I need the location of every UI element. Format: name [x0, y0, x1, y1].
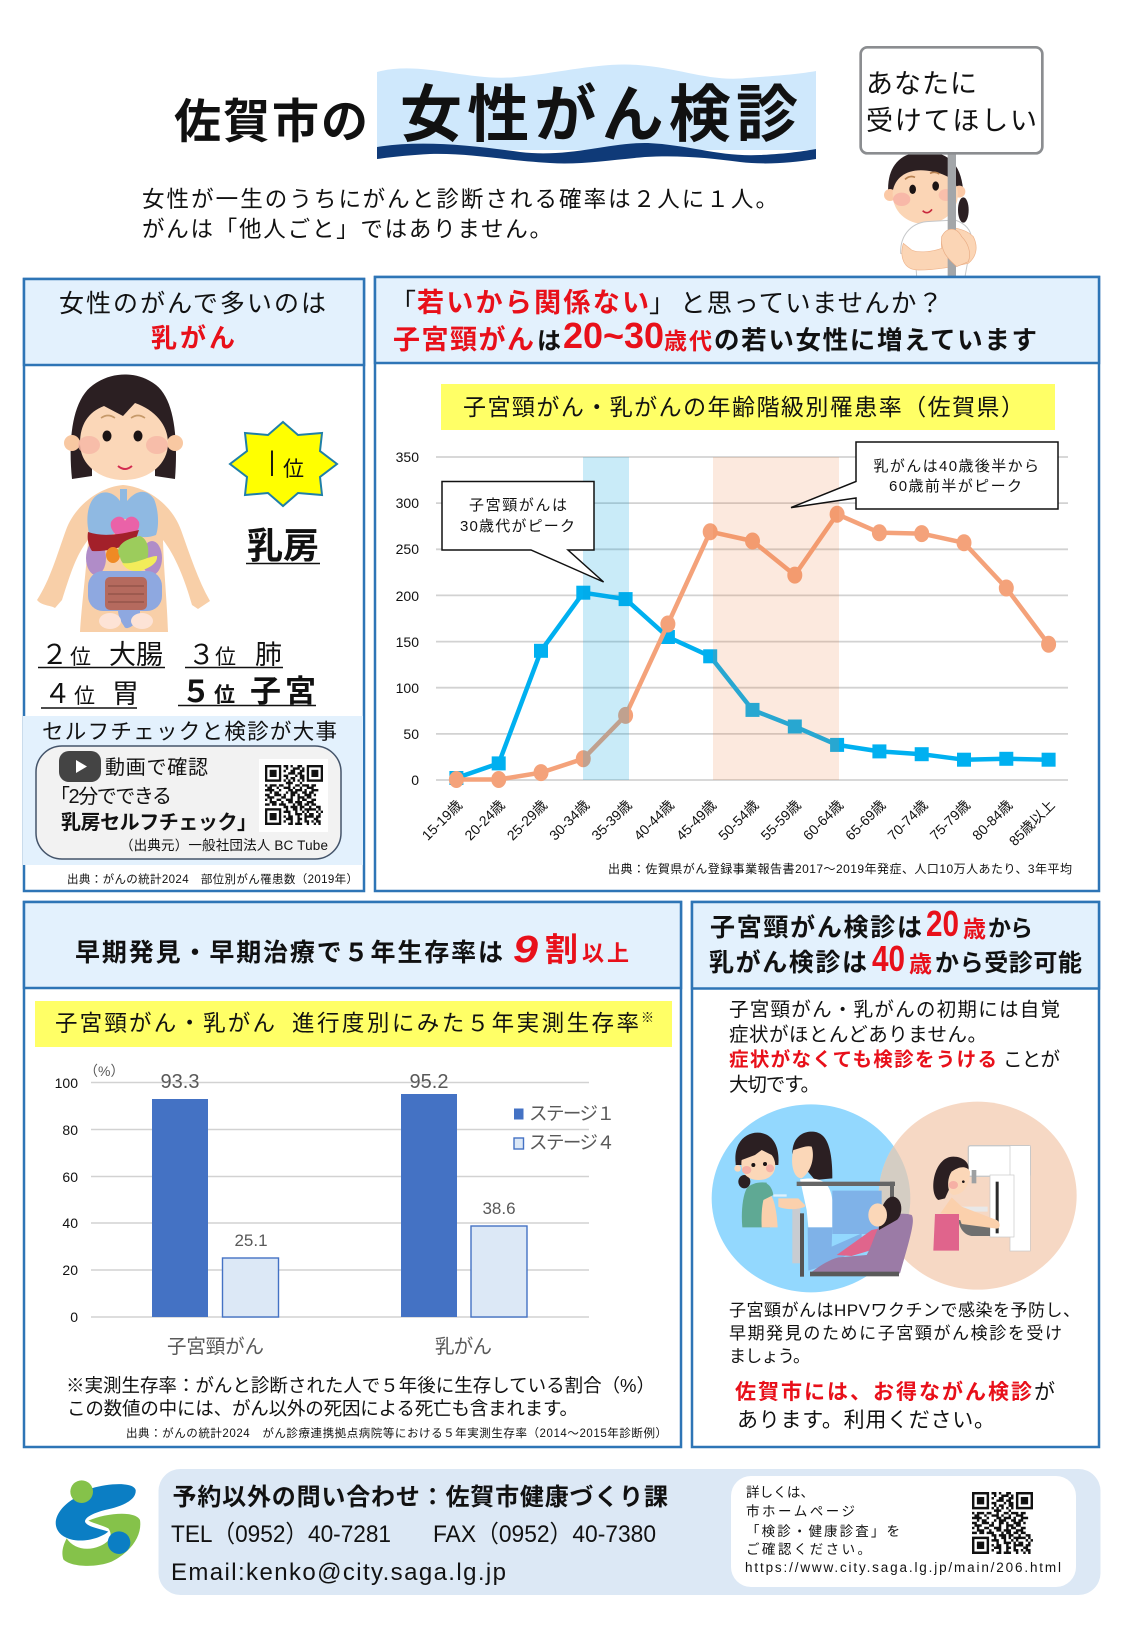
contact box [158, 1469, 1100, 1595]
bar: cervical stage 1 [152, 1099, 208, 1317]
panel header: 乳がん [151, 323, 235, 353]
panel header: は [537, 328, 561, 355]
panel header: から受診可能 [935, 950, 1082, 977]
x axis labels: 40-44歳 [630, 797, 677, 843]
source: cancer statistics: 出典：がんの統計2024 部位別がん罹患数（2019年） [67, 872, 358, 886]
panel header: 女性のがんで多いのは [59, 290, 326, 318]
source: Saga registry: 出典：佐賀県がん登録事業報告書2017～2019年発症、人口10万人あたり、3年平均 [608, 861, 1072, 876]
source: survival statistics: 出典：がんの統計2024 がん診療連携拠点病院等における５年実測生存率（2014～2015年診断例） [126, 1426, 667, 1440]
panel header: 乳がん検診は [709, 948, 867, 977]
callout: breast peak: 乳がんは40歳後半から [874, 458, 1039, 475]
rank 5: 子宮 [178, 674, 316, 709]
value labels: 25.1 [234, 1231, 268, 1250]
rank 3: 肺: 肺 [255, 640, 282, 670]
panel header: から [988, 915, 1033, 941]
text: Saga city offer: が [1034, 1381, 1055, 1404]
x axis labels: 75-79歳 [927, 797, 973, 843]
panel: 5年生存率 [24, 902, 681, 1447]
panel header [24, 279, 364, 365]
website card: 市ホームページ [746, 1504, 855, 1519]
website card: 「検診・健康診査」を [746, 1523, 900, 1539]
panel header: 割 [545, 931, 578, 968]
panel frame [24, 279, 364, 891]
callout: breast peak [791, 442, 1058, 509]
sign text: 受けてほしい [866, 106, 1037, 136]
video callout box: （出典元）一般社団法人 BC Tube [120, 838, 328, 853]
panel header: 歳代 [664, 328, 712, 354]
y axis labels [55, 1075, 78, 1325]
x axis labels: 35-39歳 [588, 797, 635, 843]
text: symptoms [729, 999, 1060, 1096]
y axis labels: 100 [55, 1075, 78, 1091]
y axis labels: 20 [62, 1262, 78, 1278]
intro text [142, 187, 778, 242]
panel header [692, 902, 1099, 988]
x axis labels: 30-34歳 [546, 797, 592, 843]
y axis labels: 0 [411, 772, 419, 788]
panel header: の若い女性に増えています [714, 327, 1037, 355]
rank 3: 肺: ３ [188, 640, 215, 670]
x axis labels: 15-19歳 [419, 797, 465, 843]
panel header: 歳 [909, 951, 932, 977]
video callout box [36, 746, 341, 859]
rank 4: 胃: 位 [74, 685, 95, 708]
x axis labels: 20-24歳 [461, 797, 508, 843]
phone and fax: TEL（0952）40-7281 [171, 1521, 391, 1548]
illustration: vaccination and screening [712, 1102, 1077, 1292]
text: Saga city offer: 佐賀市には、お得ながん検診 [735, 1380, 1032, 1404]
y axis labels: 60 [62, 1169, 78, 1185]
self-check section: セルフチェックと検診が大事 [42, 720, 337, 744]
panel header: 歳 [963, 916, 986, 942]
text: symptoms: 大切です。 [729, 1074, 820, 1096]
footnote: この数値の中には、がん以外の死因による死亡も含まれます。 [67, 1398, 578, 1419]
y axis labels: 100 [396, 680, 419, 696]
title band: 女性がん検診 [377, 64, 816, 163]
legend [514, 1103, 615, 1153]
rank 5: 子宮: 位 [214, 684, 235, 707]
category labels: 子宮頸がん [167, 1336, 264, 1358]
rank 4: 胃: 胃 [112, 679, 139, 709]
rank 4: 胃 [41, 679, 139, 709]
y axis labels: 80 [62, 1122, 78, 1138]
value labels: 95.2 [410, 1071, 448, 1093]
bar chart: 5-year survival [55, 1063, 615, 1358]
rank 2: 大腸: 位 [70, 646, 91, 669]
highlight: age 45-64 [713, 457, 839, 780]
y axis grid [436, 457, 1068, 780]
callout: cervical peak: 30歳代がピーク [460, 518, 575, 535]
intro text: がんは「他人ごと」ではありません。 [142, 217, 552, 242]
video callout box: 動画で確認 [105, 756, 208, 779]
panel header: 40 [872, 938, 905, 979]
logo: Saga city [56, 1480, 140, 1566]
x axis labels: 50-54歳 [715, 797, 762, 843]
website card [731, 1476, 1076, 1587]
value labels: 93.3 [161, 1071, 199, 1093]
series: cervical cancer [456, 593, 1049, 778]
panel header: 「 [390, 288, 416, 318]
x axis labels: 70-74歳 [884, 797, 931, 843]
value labels [161, 1071, 516, 1250]
panel header: 早期発見・早期治療で５年生存率は [75, 939, 503, 967]
footnote [66, 1375, 655, 1419]
rank 4: 胃: ４ [44, 679, 71, 709]
callout: breast peak: 60歳前半がピーク [889, 478, 1022, 495]
panel header: 9 [513, 929, 538, 971]
x axis labels: 60-64歳 [800, 797, 846, 843]
x axis labels: 65-69歳 [842, 797, 889, 843]
legend: ステージ４ [529, 1132, 615, 1153]
illustration: nurse holding sign [861, 47, 1042, 277]
panel header: 」 [649, 288, 675, 318]
phone and fax: FAX（0952）40-7380 [433, 1521, 656, 1548]
x axis labels: 85歳以上 [1006, 797, 1058, 849]
panel: 受診可能年齢 [692, 902, 1099, 1447]
video callout box: 「2分でできる [50, 785, 172, 808]
rank 5: 子宮: ５ [181, 676, 211, 709]
vaccination scene [734, 1132, 913, 1277]
bar: breast stage 4 [471, 1226, 527, 1317]
x axis labels [419, 797, 1058, 849]
rank 2: 大腸: 大腸 [109, 640, 163, 670]
y axis labels: 0 [70, 1309, 78, 1325]
title band: 女性がん検診: 女性がん検診 [400, 81, 798, 150]
chart title: 子宮頸がん・乳がん [55, 1011, 275, 1036]
panel header: 以上 [582, 941, 629, 966]
y axis labels: 50 [403, 726, 419, 742]
self-check section [23, 716, 363, 865]
video callout box: 乳房セルフチェック」 [61, 811, 257, 834]
QR code: website [972, 1493, 1033, 1553]
badge: 1位 [230, 422, 337, 506]
legend: ステージ１ [529, 1103, 615, 1124]
badge: 1位: 位 [283, 458, 304, 481]
panel header: と思っていませんか？ [680, 290, 943, 318]
y axis labels: 350 [396, 449, 419, 465]
email: Email:kenko@city.saga.lg.jp [171, 1559, 506, 1586]
x axis labels: 45-49歳 [673, 797, 719, 843]
panel header: 20 [926, 903, 959, 944]
bar: breast stage 1 [401, 1094, 457, 1317]
icon: video play [59, 751, 101, 782]
callout: cervical peak [442, 482, 604, 582]
rank 1 organ: 乳房: 乳房 [247, 525, 319, 566]
panel header [375, 277, 1099, 363]
text: HPV vaccine [729, 1301, 1080, 1366]
panel header: 子宮頸がん検診は [710, 913, 922, 942]
rank 3: 肺: 位 [215, 646, 236, 669]
text: Saga city offer [735, 1380, 1055, 1432]
panel header [24, 902, 681, 988]
rank 3: 肺 [185, 640, 283, 670]
intro text: 女性が一生のうちにがんと診断される確率は２人に１人。 [142, 187, 778, 212]
panel: 女性のがんで多いのは [23, 279, 364, 891]
badge: 1位: Ⅰ [266, 446, 278, 482]
QR code: BC Tube [259, 759, 328, 832]
y axis labels: 250 [396, 541, 419, 557]
callout: cervical peak: 子宮頸がんは [469, 497, 567, 514]
y axis labels: 150 [396, 634, 419, 650]
y axis labels: 300 [396, 495, 419, 511]
sign text [866, 69, 1037, 136]
y axis labels: 200 [396, 588, 419, 604]
footnote: ※実測生存率：がんと診断された人で５年後に生存している割合（%） [66, 1375, 655, 1396]
mammography scene [933, 1146, 1030, 1251]
chart title: ※ [641, 1010, 654, 1025]
text: symptoms: 症状がなくても検診をうける [729, 1048, 997, 1071]
x axis labels: 80-84歳 [969, 797, 1015, 843]
line chart: incidence by age [396, 442, 1072, 876]
y axis labels [396, 449, 419, 788]
panel frame [24, 902, 681, 1447]
sign text: あなたに [866, 69, 977, 99]
value labels: 38.6 [482, 1199, 516, 1218]
panel header: 20~30 [563, 315, 664, 356]
bar: cervical stage 4 [222, 1258, 278, 1317]
panel frame [375, 277, 1099, 891]
rank 2: 大腸: ２ [41, 640, 68, 670]
rank 2: 大腸 [38, 640, 165, 670]
chart title: 子宮頸がん・乳がんの年齢階級別罹患率（佐賀県） [463, 394, 1024, 420]
y axis unit: （%） [84, 1063, 124, 1079]
panel frame [692, 902, 1099, 1447]
text: Saga city offer: あります。利用ください。 [737, 1409, 995, 1432]
text: symptoms: ことが [1003, 1049, 1060, 1071]
highlight: age 30s [583, 457, 629, 780]
grid lines [91, 1082, 589, 1317]
x axis labels: 25-29歳 [504, 797, 550, 843]
contact heading: 予約以外の問い合わせ：佐賀市健康づくり課 [172, 1484, 668, 1511]
y axis labels: 40 [62, 1215, 78, 1231]
chart title: 進行度別にみた５年実測生存率 [292, 1011, 639, 1036]
text: symptoms: 症状がほとんどありません。 [729, 1024, 987, 1046]
text: HPV vaccine: 子宮頸がんはHPVワクチンで感染を予防し、 [729, 1301, 1080, 1320]
x axis labels: 55-59歳 [757, 797, 804, 843]
category labels [167, 1336, 492, 1358]
title: 佐賀市の: 佐賀市の [174, 95, 368, 148]
website card: https://www.city.saga.lg.jp/main/206.html [745, 1560, 1061, 1575]
chart title [35, 1001, 672, 1047]
chart title [441, 384, 1055, 430]
category labels: 乳がん [435, 1336, 492, 1358]
website card: 詳しくは、 [746, 1485, 814, 1500]
series: breast cancer [456, 514, 1049, 780]
text: symptoms: 子宮頸がん・乳がんの初期には自覚 [729, 999, 1060, 1021]
text: HPV vaccine: ましょう。 [729, 1347, 810, 1366]
phone and fax [171, 1521, 656, 1548]
illustration: woman with organs [37, 374, 210, 632]
rank 5: 子宮: 子宮 [250, 674, 316, 709]
text: HPV vaccine: 早期発見のために子宮頸がん検診を受け [729, 1324, 1062, 1343]
panel header: 子宮頸がん [393, 324, 534, 355]
panel header: 若いから関係ない [417, 288, 649, 318]
panel: 若い女性に増えています [375, 277, 1099, 891]
website card: ご確認ください。 [746, 1542, 871, 1557]
